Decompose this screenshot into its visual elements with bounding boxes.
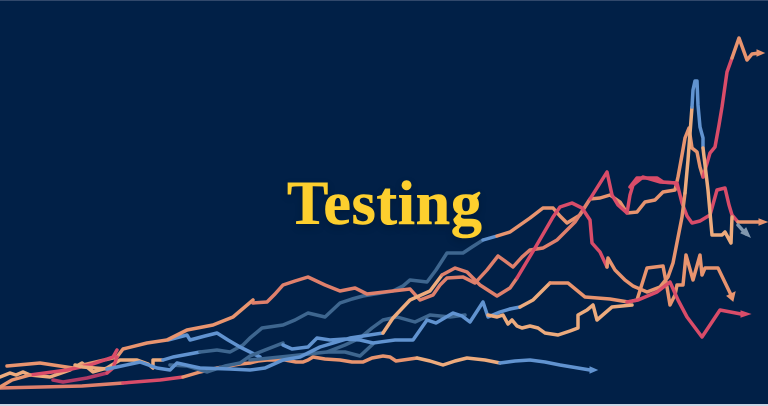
series: top red overlay bbox=[630, 178, 678, 188]
series: mid blue jagged line bbox=[283, 255, 735, 349]
series: mid blue branch line bbox=[168, 333, 260, 357]
series: red low start line bbox=[30, 350, 117, 382]
series: salmon hump line bbox=[7, 172, 767, 368]
series: jagged light orange line bbox=[488, 305, 632, 335]
series: dark blue low line bbox=[170, 315, 465, 372]
series: flat bottom line bbox=[0, 356, 597, 388]
title: Testing bbox=[287, 170, 483, 238]
series: blue to red peak line bbox=[0, 81, 750, 387]
series: red spike and drop line bbox=[627, 282, 750, 337]
